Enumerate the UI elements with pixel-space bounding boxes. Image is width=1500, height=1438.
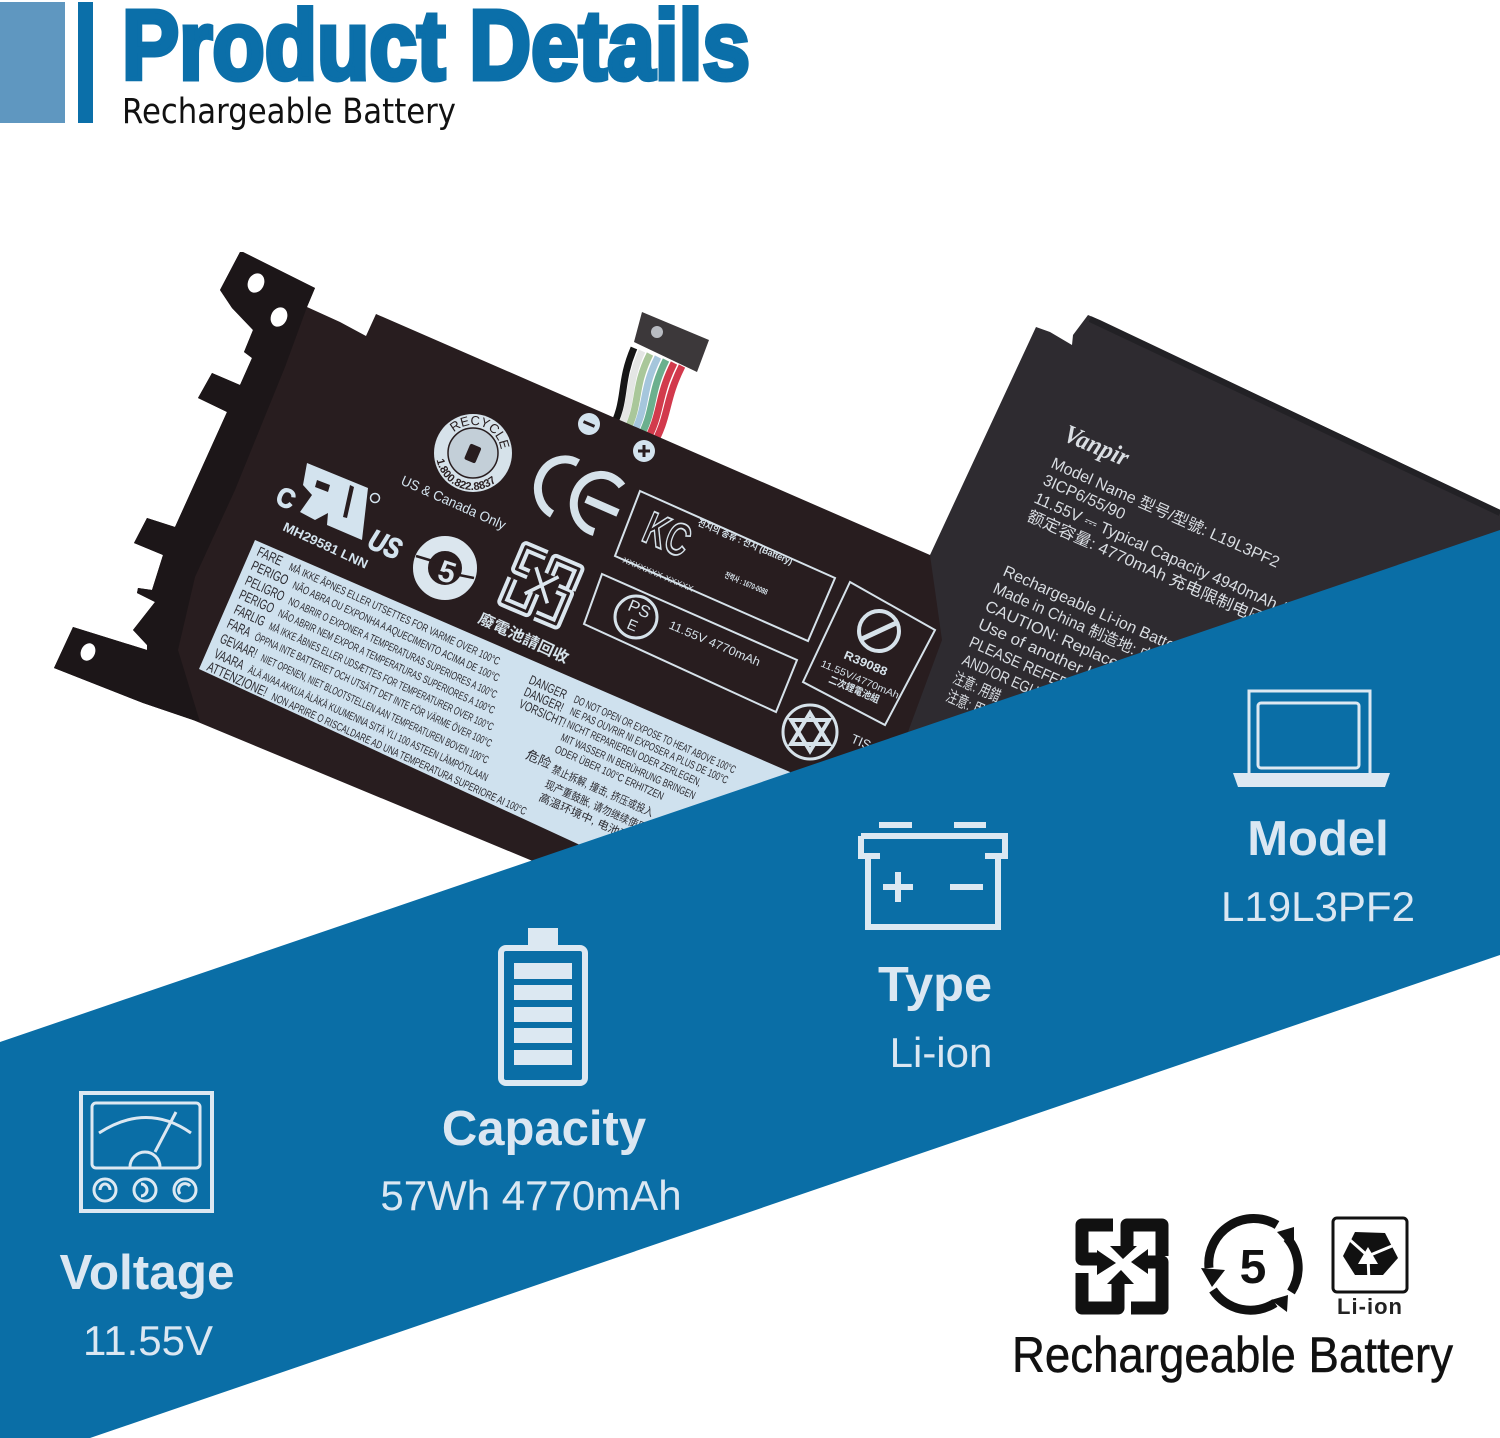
KC certificate box: KC bbox=[636, 501, 699, 567]
UL mark bbox=[272, 463, 407, 572]
UL mark: US bbox=[363, 524, 407, 567]
right cell text: 注意: 用錯 bbox=[950, 668, 1004, 706]
warning label text: ATTENZIONE! NON APRIRE O RISCALDARE AD UNA TEMPERATURA SUPERIORE AI 100°C bbox=[205, 658, 530, 818]
icon: car battery bbox=[861, 825, 1005, 927]
value: voltage: 11.55V bbox=[83, 1317, 213, 1364]
certification logos bbox=[1012, 1218, 1453, 1383]
right cell text: CAUTION: Replace with bbox=[982, 598, 1152, 686]
KC certificate box: 전지의 종류 : 전지 (Battery) bbox=[696, 518, 794, 567]
KC certificate box: 전력사 : 1670-0088 bbox=[723, 570, 770, 597]
cable wires bbox=[610, 348, 682, 447]
UL mark: MH29581 LNN bbox=[281, 519, 370, 572]
recycling mark on label bbox=[503, 547, 579, 624]
warning label text: 危险 bbox=[524, 747, 554, 771]
header block bbox=[0, 2, 93, 123]
feature: voltage bbox=[60, 1093, 234, 1364]
warning label text: 禁止拆解, 撞击, 挤压或投入 bbox=[550, 762, 656, 819]
PSE certificate box bbox=[584, 574, 797, 712]
main cell with mounting tabs bbox=[54, 252, 942, 862]
feature: type bbox=[861, 825, 1005, 1076]
recycle seal: 1.800.822.8837 bbox=[436, 458, 494, 490]
icon: 5-year cycle bbox=[1201, 1219, 1298, 1312]
warning label text: VORSICHT! bbox=[517, 696, 569, 730]
right cell text: 额定容量: 4770mAh 充电限制电压 (lim bbox=[1024, 507, 1297, 642]
warning label text: FARE MÅ IKKE ÅPNES ELLER UTSETTES FOR VARME OVER 100°C bbox=[255, 543, 503, 668]
polarity marks bbox=[578, 413, 655, 462]
Chinese recycling caption: 廢電池請回收 bbox=[475, 609, 572, 667]
icon: battery recycling bbox=[1082, 1225, 1162, 1308]
CE mark bbox=[538, 459, 622, 532]
PSE certificate box: PS bbox=[625, 596, 653, 622]
right cell text: PLEASE REFER TO bbox=[966, 634, 1092, 703]
right cell text: 11.55V ⎓ Typical Capacity 4940mAh / 57Wh bbox=[1031, 490, 1331, 636]
warning label text: PERIGO NÃO ABRIR NEM EXPOR A TEMPERATURAS SUPERIORES A 100°C bbox=[237, 586, 498, 717]
warning label text: 高温环境中, 电池变形 bbox=[537, 790, 643, 847]
right cell text: Made in China 制造地: 中国 bbox=[990, 579, 1171, 673]
UL mark: C bbox=[272, 481, 300, 516]
recycle seal: US & Canada Only bbox=[399, 472, 509, 533]
KC certificate box bbox=[615, 491, 835, 641]
mounting holes bbox=[78, 271, 290, 663]
warning label text: NICHT REPARIEREN ODER ZERLEGEN, bbox=[565, 719, 703, 789]
value: type: Li-ion bbox=[890, 1029, 992, 1076]
rechargeable battery caption: Rechargeable Battery bbox=[1012, 1327, 1453, 1383]
warning label text: NE PAS OUVRIR NI EXPOSER A PLUS DE 100°C bbox=[568, 706, 730, 787]
icon: laptop bbox=[1233, 691, 1390, 787]
value: capacity: 57Wh 4770mAh bbox=[380, 1172, 682, 1219]
recycle seal: RECYCLE bbox=[450, 416, 510, 449]
KC certificate box: XXXXXXX-XXXXX bbox=[621, 556, 695, 594]
right cell text: Rechargeable Li-ion Battery bbox=[1000, 563, 1190, 660]
right cell text: Vanpir bbox=[1060, 419, 1134, 472]
blue diagonal band bbox=[0, 530, 1500, 1438]
cable connector bbox=[634, 312, 709, 372]
battery photo bbox=[54, 252, 1500, 860]
PSE certificate box: 11.55V 4770mAh bbox=[667, 618, 763, 669]
PSE certificate box: E bbox=[624, 616, 640, 636]
warning label text: DANGER! bbox=[522, 684, 566, 715]
Li-ion label: Li-ion bbox=[1337, 1294, 1402, 1319]
recycle seal bbox=[399, 414, 512, 533]
subtitle: Rechargeable Battery bbox=[122, 92, 456, 132]
warning label text bbox=[205, 543, 737, 847]
warning label text: VAARA ÄLÄ AVAA AKKUA ÄLÄKÄ KUUMENNA SITÄ YLI 100 ASTEEN LÄMPÖTILAAN bbox=[212, 645, 491, 784]
TIS mark: TIS bbox=[849, 731, 874, 753]
warning label text: DO NOT OPEN OR EXPOSE TO HEAT ABOVE 100°C bbox=[572, 694, 737, 776]
right cell text: Model Name 型号/型號: L19L3PF2 bbox=[1048, 454, 1282, 572]
R39088 certificate box bbox=[803, 582, 935, 725]
warning label text: PELIGRO NO ABRIR O EXPONER A TEMPERATURAS SUPERIORES A 100°C bbox=[243, 572, 501, 701]
icon: voltmeter bbox=[81, 1093, 212, 1211]
right cell text: AND/OR EGUIPMENT bbox=[959, 652, 1085, 721]
right cell text: 注意: 用 bbox=[943, 686, 988, 720]
right cell text bbox=[943, 419, 1331, 721]
icon: battery bbox=[501, 928, 585, 1083]
warning label text: PERIGO NÃO ABRA OU EXPONHA A AQUECIMENTO ACIMA DE 100°C bbox=[249, 557, 503, 685]
5 year mark: 5 bbox=[434, 554, 460, 591]
warning label text: ODER ÜBER 100°C ERHITZEN bbox=[553, 744, 665, 803]
warning label text: 现产重鼓胀, 请勿继续使用 bbox=[543, 777, 649, 834]
R39088 certificate box: 二次鋰電池組 bbox=[827, 673, 882, 706]
heading: capacity: Capacity bbox=[442, 1102, 646, 1156]
warning label text: FARA ÖPPNA INTE BATTERIET OCH UTSÄTT DET INTE FÖR VÄRME ÖVER 100°C bbox=[225, 615, 495, 750]
right cell text: 3ICP6/55/90 bbox=[1040, 472, 1128, 523]
warning label text: GEVAAR! NIET OPENEN, NIET BLOOTSTELLEN AAN TEMPERATUREN BOVEN 100°C bbox=[218, 630, 492, 767]
TIS mark bbox=[783, 705, 874, 759]
warning label text: DANGER bbox=[527, 672, 569, 702]
R39088 certificate box: 11.55V/4770mAh bbox=[819, 659, 900, 702]
warning label text: FARLIG MÅ IKKE ÅBNES ELLER UDSÆTTES FOR TEMPERATURER OVER 100°C bbox=[232, 601, 497, 734]
right cell bbox=[800, 315, 1500, 900]
right cell text: Use of another battery bbox=[975, 616, 1138, 701]
heading: type: Type bbox=[878, 958, 992, 1012]
R39088 certificate box: R39088 bbox=[842, 648, 890, 679]
warning label text: MIT WASSER IN BERÜHRUNG BRINGEN bbox=[559, 732, 697, 802]
heading: model: Model bbox=[1247, 812, 1389, 866]
warning label bbox=[199, 540, 790, 900]
feature: model bbox=[1221, 691, 1415, 930]
icon: 5-year cycle: 5 bbox=[1240, 1241, 1266, 1294]
value: model: L19L3PF2 bbox=[1221, 883, 1415, 930]
heading: voltage: Voltage bbox=[60, 1246, 234, 1300]
darker frame strip bbox=[54, 252, 315, 722]
5 year mark bbox=[416, 544, 474, 592]
icon: Li-ion recycling box bbox=[1333, 1218, 1407, 1292]
feature: capacity bbox=[380, 928, 682, 1219]
